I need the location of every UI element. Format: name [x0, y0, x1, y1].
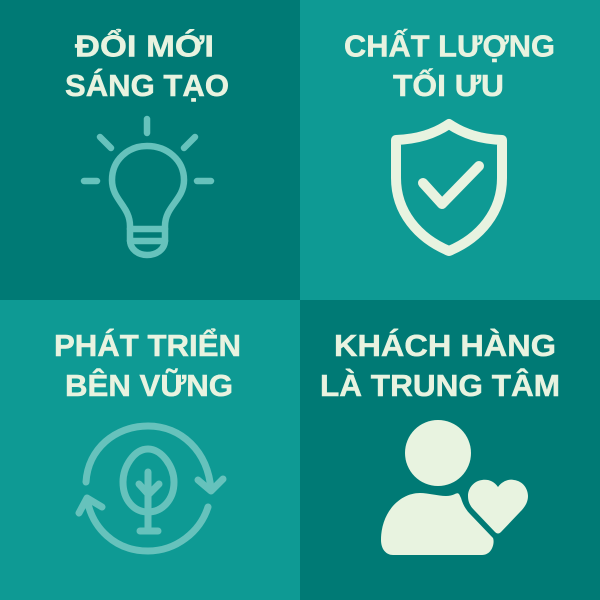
icon: person with heart	[381, 420, 528, 555]
heading: customer centric: LÀ TRUNG TÂM	[320, 367, 560, 403]
heading: sustainable development	[54, 328, 241, 403]
heading: innovation: SÁNG TẠO	[65, 68, 229, 103]
heading: customer centric: KHÁCH HÀNG	[334, 328, 556, 363]
heading: innovation: ĐỔI MỚI	[75, 28, 214, 64]
heading: sustainable development: PHÁT TRIỂN	[54, 328, 241, 363]
panel: quality	[300, 0, 600, 300]
heading: innovation	[65, 28, 229, 103]
heading: sustainable development: BÊN VỮNG	[65, 367, 233, 403]
icon: sprout in cycle	[79, 426, 223, 551]
heading: quality	[344, 28, 555, 103]
panel: sustainable development	[0, 300, 300, 600]
heading: quality: CHẤT LƯỢNG	[344, 28, 555, 64]
panel: innovation	[0, 0, 300, 300]
heading: customer centric	[320, 328, 560, 403]
heading: quality: TỐI ƯU	[393, 67, 504, 103]
panel: customer centric	[300, 300, 600, 600]
icon: shield with check	[396, 124, 502, 251]
icon: light bulb	[84, 119, 211, 255]
